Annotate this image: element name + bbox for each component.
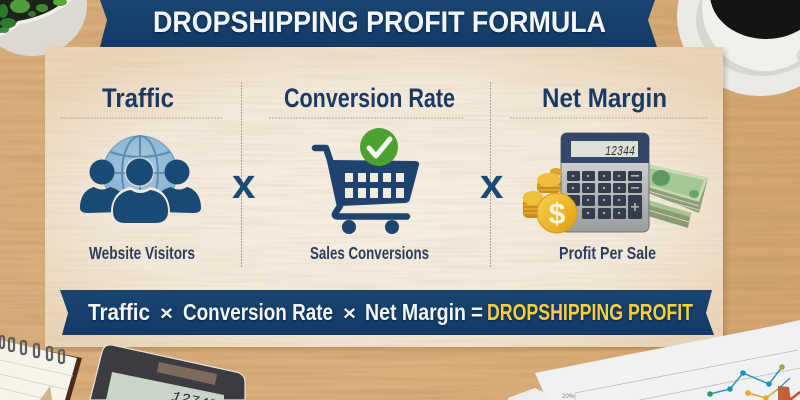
- icon: gold coins: $: [549, 198, 566, 231]
- paper panel: [45, 47, 726, 350]
- icon: gold coins: [522, 168, 577, 233]
- column: traffic: [61, 83, 222, 263]
- label: profit per sale: Profit Per Sale: [559, 243, 656, 263]
- label: website visitors: Website Visitors: [89, 243, 195, 263]
- formula text: Conversion Rate: [183, 299, 333, 325]
- check badge: [360, 128, 398, 166]
- icon: calculator: 12344: [605, 144, 635, 160]
- pencil: [40, 386, 52, 400]
- label: sales conversions: Sales Conversions: [310, 243, 429, 263]
- divider 2: [490, 82, 492, 268]
- multiply sign 2: x: [480, 160, 504, 207]
- column: conversion rate: [269, 83, 464, 263]
- plant leaves: [0, 0, 67, 33]
- icon: calculator: [561, 133, 649, 232]
- title: DROPSHIPPING PROFIT FORMULA: [153, 6, 606, 39]
- title banner: [100, 0, 657, 47]
- report papers with chart: [508, 320, 800, 400]
- formula text: Net Margin: [365, 299, 466, 325]
- cart grid: [345, 173, 404, 198]
- multiply sign 1: x: [232, 160, 256, 207]
- column: net margin: [510, 83, 708, 263]
- coffee cup on saucer: [677, 0, 800, 96]
- line chart: [707, 364, 800, 400]
- desk calculator: [90, 345, 245, 400]
- formula banner: [60, 290, 714, 335]
- heading: traffic: Traffic: [102, 83, 174, 113]
- heading: net margin: Net Margin: [542, 83, 667, 113]
- formula text: Traffic: [88, 299, 150, 325]
- icon: shopping cart with check: [315, 128, 419, 234]
- formula text: ×: [160, 303, 173, 325]
- spiral rings: [0, 336, 64, 363]
- formula text: DROPSHIPPING PROFIT: [487, 299, 693, 325]
- plant pot: [0, 0, 87, 56]
- formula text: ×: [343, 303, 356, 325]
- icon: people with globe: [80, 136, 201, 225]
- icon: cash stacks: [648, 164, 708, 228]
- notebook: [0, 336, 82, 400]
- chart axis label: 20%: [562, 394, 575, 400]
- formula text: [88, 299, 693, 325]
- calculator keys: [567, 171, 642, 219]
- heading: conversion rate: Conversion Rate: [284, 83, 455, 113]
- divider 1: [240, 82, 242, 268]
- formula text: =: [471, 299, 483, 325]
